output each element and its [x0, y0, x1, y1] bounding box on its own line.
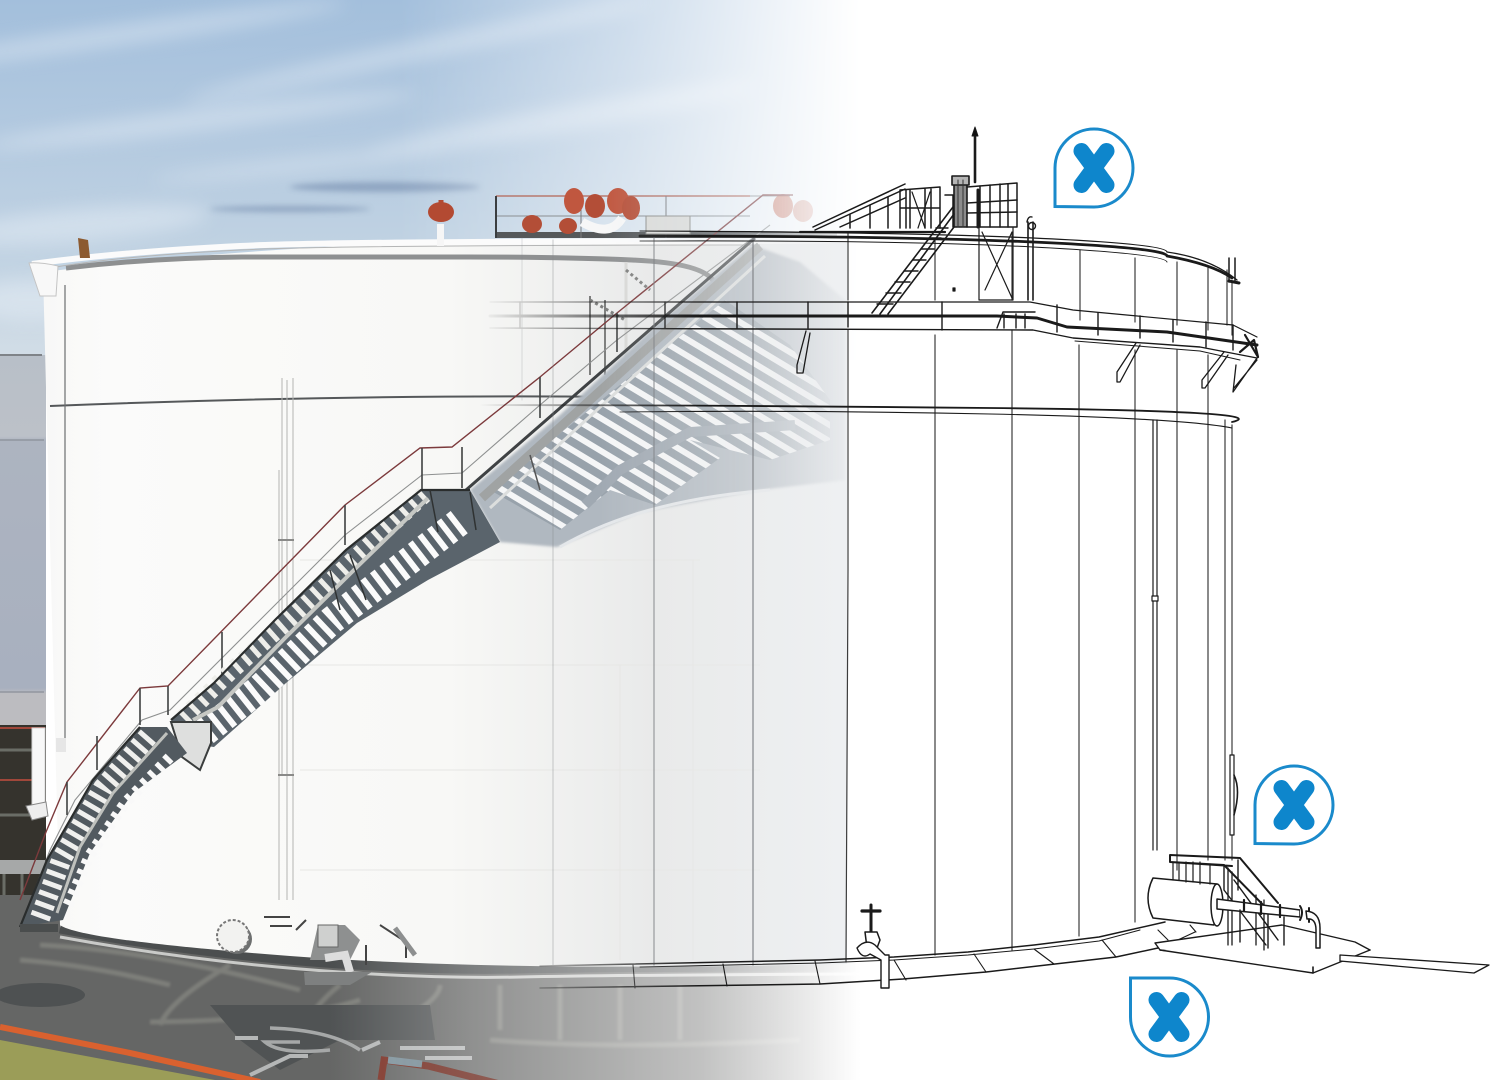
photo: sky with clouds: [0, 0, 870, 360]
stair and platform at base: [1170, 855, 1278, 950]
gauge riser: [278, 378, 294, 900]
manhole: [217, 920, 252, 954]
red pipe in foreground: [381, 1060, 500, 1080]
outlet pipe with flanges: [1217, 899, 1320, 948]
photo: background tank and plant: [0, 355, 46, 897]
mid platform equipment: [590, 262, 650, 375]
middle stair flight: [171, 490, 500, 770]
tank shell: [43, 242, 847, 967]
roof vents and platform: [78, 188, 837, 258]
tank roof edge and shadow: [32, 241, 830, 282]
left vertical pipes: [26, 263, 66, 820]
lower stair flight: [20, 727, 187, 932]
callout pin: shell cross: [1255, 766, 1333, 844]
callout pin: roof cross: [1055, 129, 1133, 207]
base annular plate: [540, 922, 1196, 988]
braced frame under platform: [953, 217, 1036, 300]
wind girder ring: [440, 405, 1239, 428]
shell vertical seams: [522, 232, 1232, 965]
large horizontal cylinder: [1148, 878, 1223, 926]
stair rails: [20, 195, 793, 915]
roof rail: [640, 231, 1239, 283]
gallery brackets: [797, 331, 1257, 392]
roof ladder: [872, 207, 954, 314]
gallery walkway: [490, 302, 1258, 360]
gate valve at base: [857, 905, 889, 988]
stair shadow on the tank: [470, 245, 845, 547]
photo: ground: [0, 895, 870, 1080]
grass and orange kerb: [0, 1027, 260, 1080]
concrete slab: [1155, 925, 1370, 973]
base valves and gauge box: [264, 917, 415, 985]
line drawing of the tank: [440, 127, 1489, 988]
callout pin: base cross: [1130, 978, 1209, 1056]
tower platform railing: [945, 183, 1017, 227]
roof walkway truss: [800, 184, 945, 232]
icon: blue cross: [1082, 151, 1106, 185]
drain pipe on the shell: [1152, 420, 1238, 850]
horizontal stiffener ring: [50, 396, 620, 406]
shell plate seams: [300, 560, 607, 870]
slab drain ramp: [1340, 955, 1489, 973]
icon: blue cross: [1156, 1000, 1182, 1034]
icon: blue cross: [1282, 788, 1306, 822]
tower column and vent: [952, 127, 978, 227]
photo details on the tank: [20, 188, 845, 985]
upper stair flight: [466, 238, 765, 508]
